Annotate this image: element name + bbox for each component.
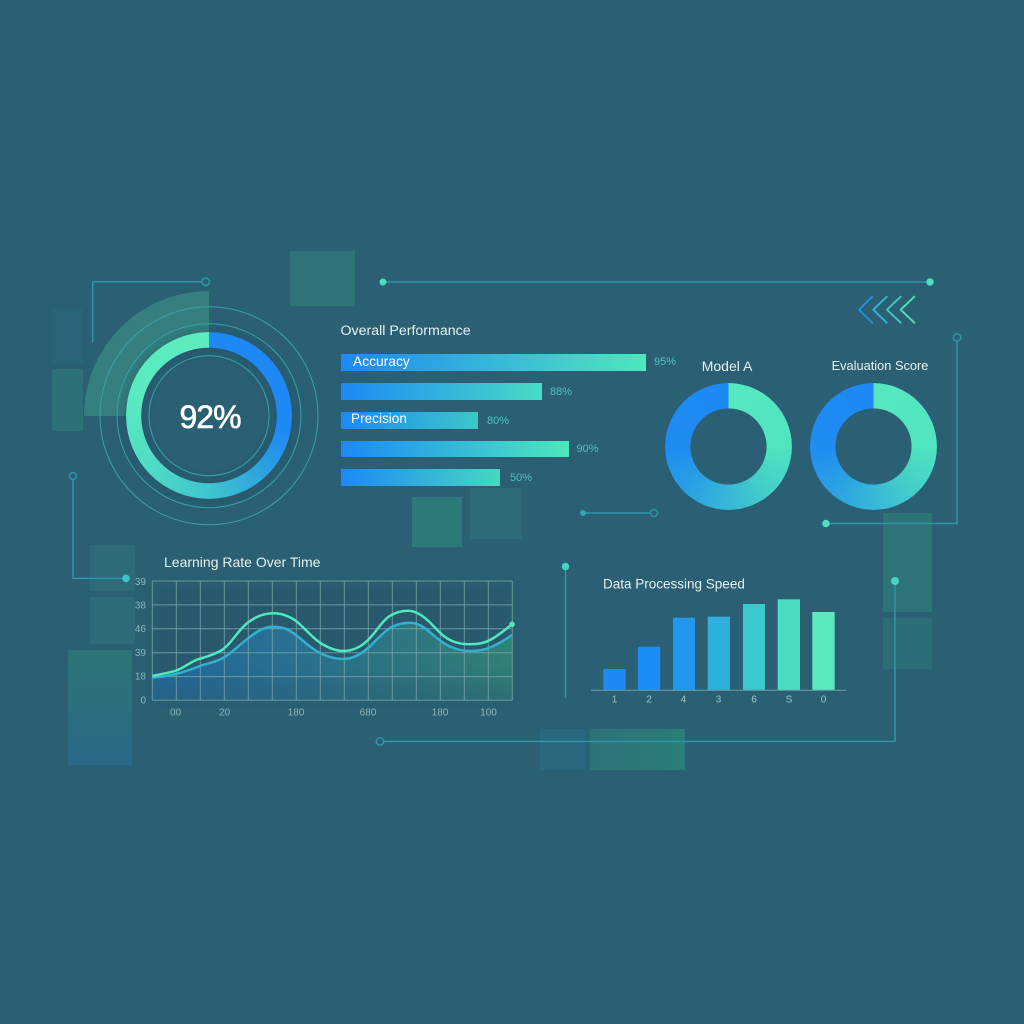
heading: learning rate: Learning Rate Over Time bbox=[164, 554, 321, 570]
x axis labels: 00 bbox=[170, 708, 181, 718]
bar: fourth row bbox=[341, 440, 569, 457]
y axis labels: 18 bbox=[135, 672, 146, 682]
charts overlay bbox=[135, 296, 916, 716]
y axis labels: 38 bbox=[135, 600, 146, 612]
chart backdrop bbox=[156, 585, 508, 697]
quarter sector behind gauge bbox=[84, 291, 209, 416]
text: 90% bbox=[576, 443, 599, 455]
connector lines bbox=[70, 278, 961, 745]
bar value labels bbox=[487, 356, 676, 484]
text: 95% bbox=[654, 356, 676, 368]
text: 50% bbox=[510, 472, 532, 484]
x axis labels: 680 bbox=[360, 708, 377, 718]
bar chart labels: 2 bbox=[646, 694, 652, 706]
square decorations bbox=[52, 251, 932, 770]
y axis labels: 46 bbox=[135, 624, 146, 635]
x axis labels bbox=[170, 708, 497, 718]
bar chart labels: S bbox=[786, 694, 793, 706]
bar chart bbox=[591, 599, 846, 706]
bar: precision bbox=[341, 412, 478, 428]
heading: model A: Model A bbox=[702, 358, 752, 374]
connector end dots bbox=[122, 278, 934, 585]
x axis labels: 180 bbox=[288, 708, 305, 718]
blue series line bbox=[152, 623, 512, 678]
y axis labels: 39 bbox=[135, 577, 146, 588]
green series line bbox=[152, 611, 512, 676]
bar: accuracy: Accuracy bbox=[353, 354, 410, 369]
y axis labels bbox=[135, 577, 146, 706]
bar: accuracy bbox=[341, 354, 646, 371]
gauge shadow bbox=[134, 341, 284, 491]
bar chart labels bbox=[612, 694, 827, 706]
bar chart axis bbox=[591, 689, 846, 691]
area under curve bbox=[152, 623, 512, 700]
bar chart labels: 0 bbox=[821, 694, 827, 706]
heading: data processing speed: Data Processing Speed bbox=[603, 576, 745, 592]
x axis labels: 180 bbox=[432, 708, 449, 718]
gauge thin rings bbox=[100, 307, 318, 525]
series end dot bbox=[509, 622, 515, 627]
y axis labels: 39 bbox=[135, 648, 146, 659]
heading: overall performance: Overall Performance bbox=[340, 323, 471, 339]
donut: evaluation score bbox=[810, 383, 937, 510]
text: 80% bbox=[487, 415, 509, 427]
bar chart labels: 6 bbox=[751, 694, 757, 706]
bar: precision: Precision bbox=[351, 411, 407, 426]
gauge ring bbox=[126, 332, 292, 499]
grid bbox=[152, 581, 512, 700]
text: 88% bbox=[550, 386, 572, 398]
heading: evaluation score: Evaluation Score bbox=[832, 358, 928, 373]
bar chart labels: 4 bbox=[681, 694, 687, 706]
gauge value: 92% bbox=[179, 399, 241, 435]
bar: second row bbox=[341, 383, 542, 400]
x axis labels: 20 bbox=[219, 708, 230, 718]
icon: chevrons bbox=[859, 297, 914, 323]
x axis labels: 100 bbox=[480, 708, 497, 718]
bar chart labels: 3 bbox=[716, 694, 722, 706]
line chart bbox=[135, 577, 515, 718]
bar chart labels: 1 bbox=[612, 694, 618, 706]
y axis labels: 0 bbox=[140, 696, 146, 706]
donut: model A bbox=[665, 383, 792, 510]
bar: fifth row bbox=[341, 469, 500, 486]
